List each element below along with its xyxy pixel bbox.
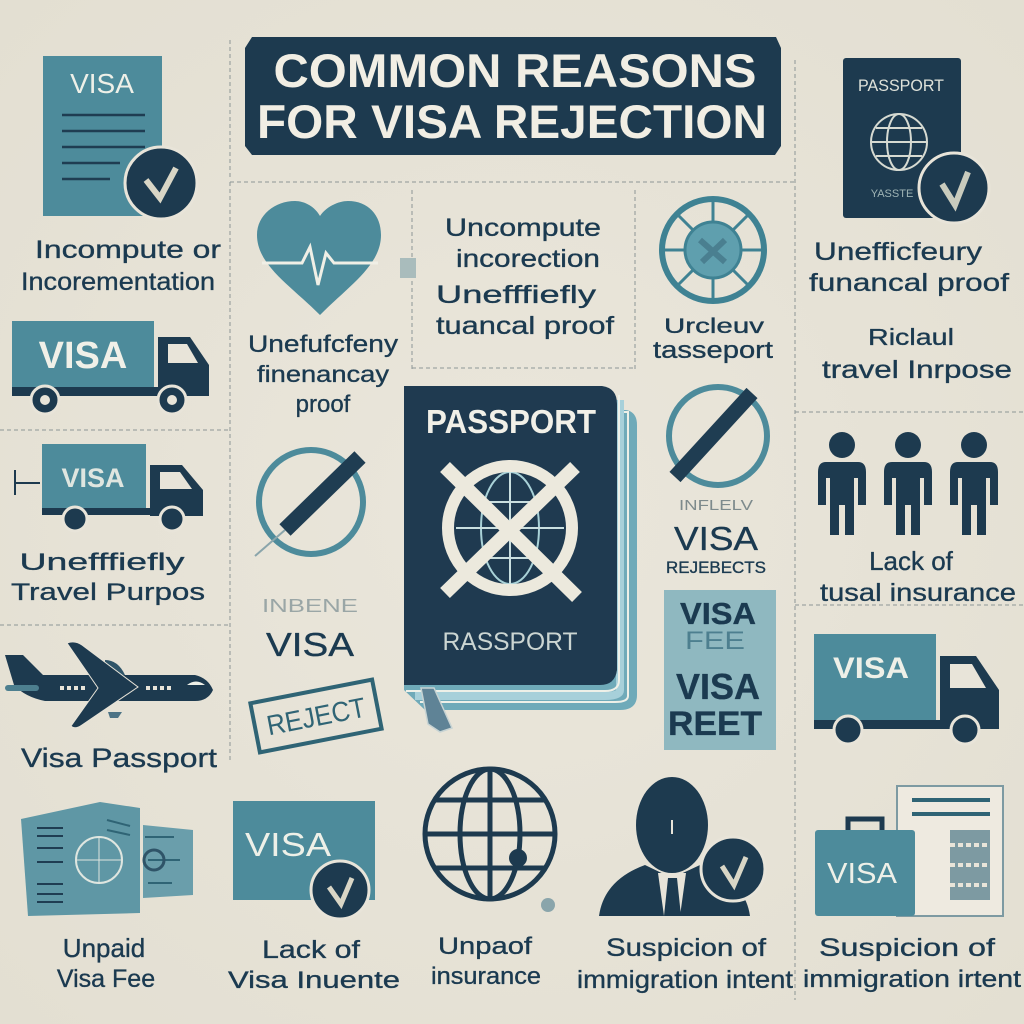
icon: globe: [425, 769, 555, 912]
label: unpaid insurance: Unpaof: [438, 933, 532, 960]
label: lack of visa intent: [228, 936, 400, 994]
label: unclear passport: tasseport: [653, 337, 773, 364]
label: insufficient financial proof: [248, 331, 398, 418]
label: lack of insurance: tusal insurance: [820, 579, 1016, 607]
icon: visa document with check: VISA: [70, 68, 134, 99]
title: FOR VISA REJECTION: [257, 95, 767, 148]
icon: prohibited sign 2: [669, 387, 767, 485]
text block: center top: Uncompute: [445, 214, 601, 242]
label: unclear passport: [653, 315, 773, 364]
icon: visa document with check: [43, 56, 197, 219]
icon: visa truck 3: VISA: [833, 652, 909, 685]
text block: center top: [436, 214, 614, 340]
label: travel purpose: Travel Purpos: [11, 579, 205, 606]
label: travel purpose: [11, 549, 205, 606]
icon: passport top right: YASSTE: [871, 188, 913, 200]
label: suspicion of immigration intent right: immigration irtent: [803, 966, 1021, 993]
icon: small stamp: [400, 258, 416, 278]
icon: airplane: [5, 642, 213, 728]
label: travel purpose: Unefffiefly: [20, 549, 184, 576]
label: unpaid visa fee: [57, 933, 155, 993]
card: visa fee reject: [664, 590, 776, 750]
label: incomplete information: Incompute or: [35, 236, 221, 264]
icon: visa truck 2: VISA: [61, 463, 125, 493]
icon: passport top right: [843, 58, 989, 223]
title: COMMON REASONS: [274, 44, 756, 97]
label: visa rejects: REJEBECTS: [666, 558, 766, 577]
icon: central passport: [404, 386, 637, 732]
card: visa fee reject: FEE: [685, 627, 745, 655]
label: unclear financial proof: [809, 238, 1009, 297]
label: suspicion of immigration intent: immigration intent: [577, 966, 793, 994]
label: visa passport: Visa Passport: [21, 743, 218, 773]
icon: visa card with check: VISA: [245, 826, 331, 863]
icon: visa truck 3: [814, 634, 999, 744]
label: visa: VISA: [266, 626, 354, 663]
label: suspicion of immigration intent right: [803, 934, 1021, 993]
card: visa fee reject: VISA: [676, 666, 760, 707]
label: lack of visa intent: Visa Inuente: [228, 967, 400, 994]
label: incomplete information: [21, 236, 221, 296]
icon: central passport: RASSPORT: [442, 628, 578, 656]
icon: crossed globe wheel: [661, 198, 765, 302]
label: insufficient financial proof: Unefufcfeny: [248, 331, 398, 358]
label: visa: INBENE: [262, 596, 358, 616]
title: [245, 37, 781, 155]
label: suspicion of immigration intent: [577, 934, 793, 994]
label: unpaid visa fee: Unpaid: [63, 933, 145, 963]
icon: briefcase and documents: VISA: [827, 858, 898, 890]
label: unpaid visa fee: Visa Fee: [57, 965, 155, 993]
icon: visa truck 2: [15, 444, 203, 531]
text block: center top: incorection: [456, 245, 600, 273]
label: lack of visa intent: Lack of: [262, 936, 360, 964]
label: incomplete information: Incorementation: [21, 268, 215, 296]
icon: open passport: [21, 802, 193, 916]
label: unclear financial proof: funancal proof: [809, 269, 1009, 297]
icon: visa truck 1: VISA: [39, 335, 127, 377]
icon: passport top right: PASSPORT: [858, 76, 944, 95]
label: unpaid insurance: [431, 933, 541, 990]
label: visa: [262, 596, 358, 663]
icon: briefcase and documents: [815, 786, 1003, 916]
text block: center top: Unefffiefly: [436, 281, 597, 309]
label: insufficient financial proof: finenancay: [257, 361, 390, 387]
icon: prohibited sign 1: [255, 450, 363, 556]
label: travel purpose right: travel Inrpose: [822, 356, 1012, 384]
label: lack of insurance: [820, 546, 1016, 607]
text block: center top: tuancal proof: [436, 312, 614, 340]
icon: visa card with check: [233, 801, 375, 919]
label: unpaid insurance: insurance: [431, 963, 541, 990]
stamp: reject: REJECT: [264, 692, 368, 741]
icon: visa truck 1: [12, 321, 209, 414]
icon: three people: [818, 432, 998, 535]
stamp: reject: [250, 680, 382, 752]
label: visa rejects: [666, 497, 766, 577]
label: unclear passport: Urcleuv: [664, 315, 765, 338]
label: suspicion of immigration intent: Suspicion of: [606, 934, 766, 962]
label: travel purpose right: [822, 324, 1012, 384]
icon: businessman with check: [599, 777, 765, 916]
card: visa fee reject: VISA: [680, 596, 756, 631]
label: lack of insurance: Lack of: [869, 546, 954, 576]
label: visa rejects: INFLELV: [679, 497, 753, 514]
icon: central passport: PASSPORT: [426, 403, 596, 440]
label: suspicion of immigration intent right: Suspicion of: [819, 934, 995, 962]
label: unclear financial proof: Unefficfeury: [814, 238, 983, 266]
icon: heart with pulse: [257, 201, 381, 315]
label: insufficient financial proof: proof: [296, 391, 351, 418]
label: visa rejects: VISA: [674, 520, 758, 557]
card: visa fee reject: REET: [668, 705, 762, 743]
label: travel purpose right: Riclaul: [868, 324, 954, 350]
